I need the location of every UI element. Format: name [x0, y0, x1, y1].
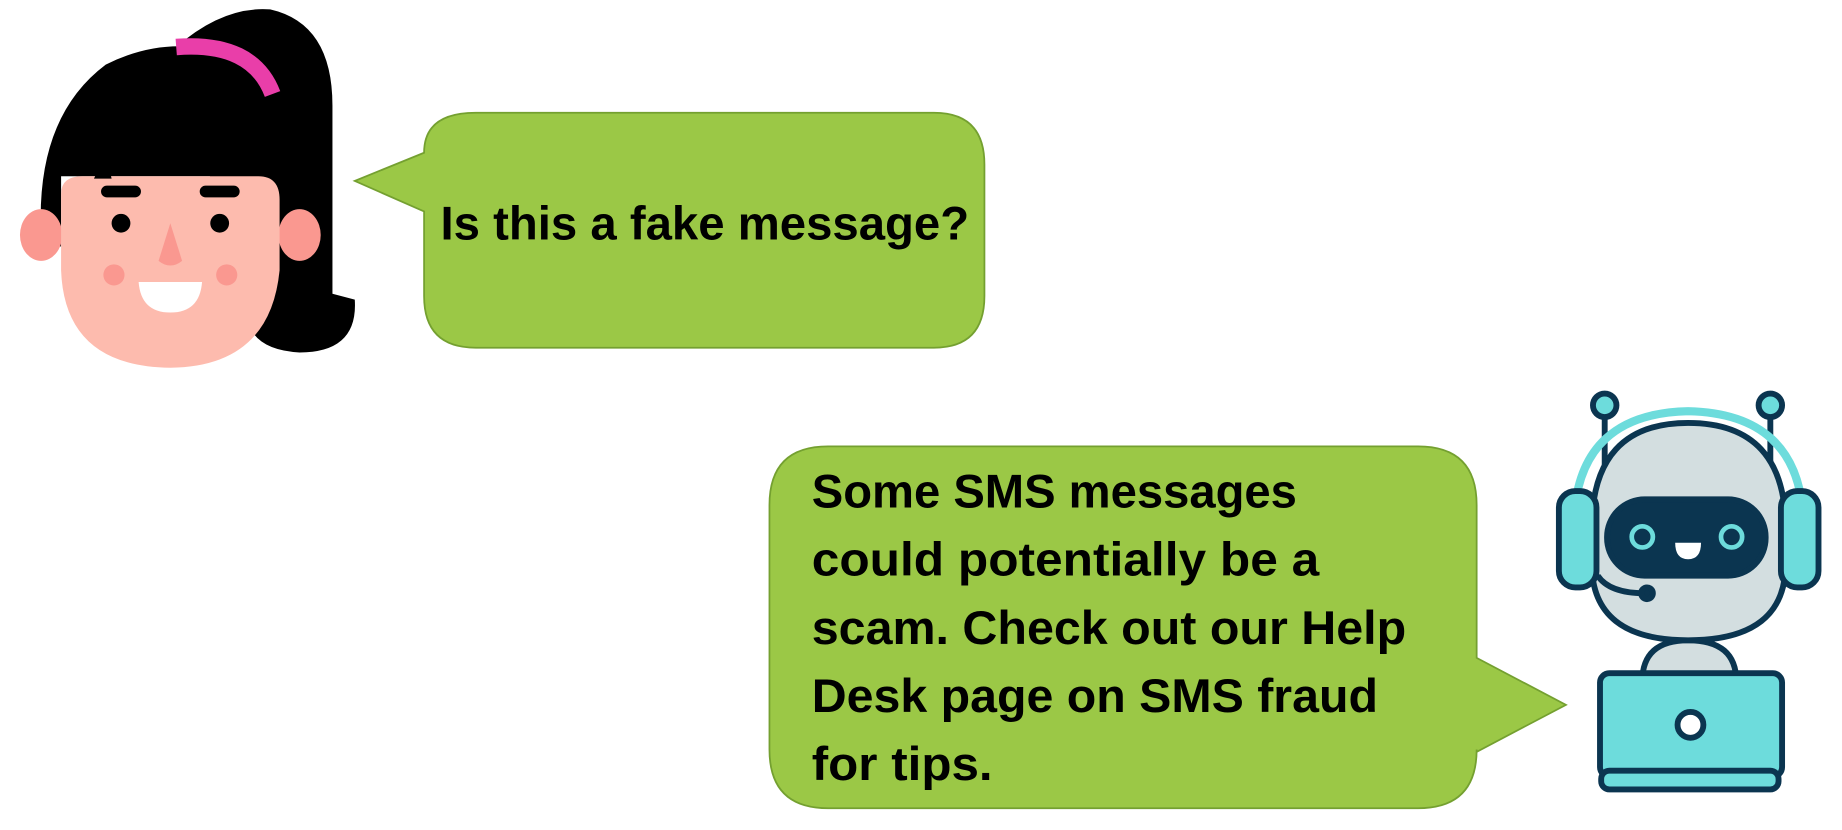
- speech bubble: question: [355, 113, 984, 348]
- text: answer: Desk page on SMS fraud: [812, 669, 1378, 722]
- icon: robot with laptop: [1559, 394, 1819, 789]
- text: answer: for tips.: [812, 737, 993, 790]
- icon: girl face: [20, 9, 355, 368]
- speech bubble: answer: [769, 446, 1566, 808]
- text: answer: scam. Check out our Help: [812, 601, 1406, 654]
- text: answer: could potentially be a: [812, 533, 1320, 586]
- text: answer: Some SMS messages: [812, 465, 1297, 518]
- text: question: Is this a fake message?: [441, 197, 969, 250]
- text: answer: [812, 465, 1406, 790]
